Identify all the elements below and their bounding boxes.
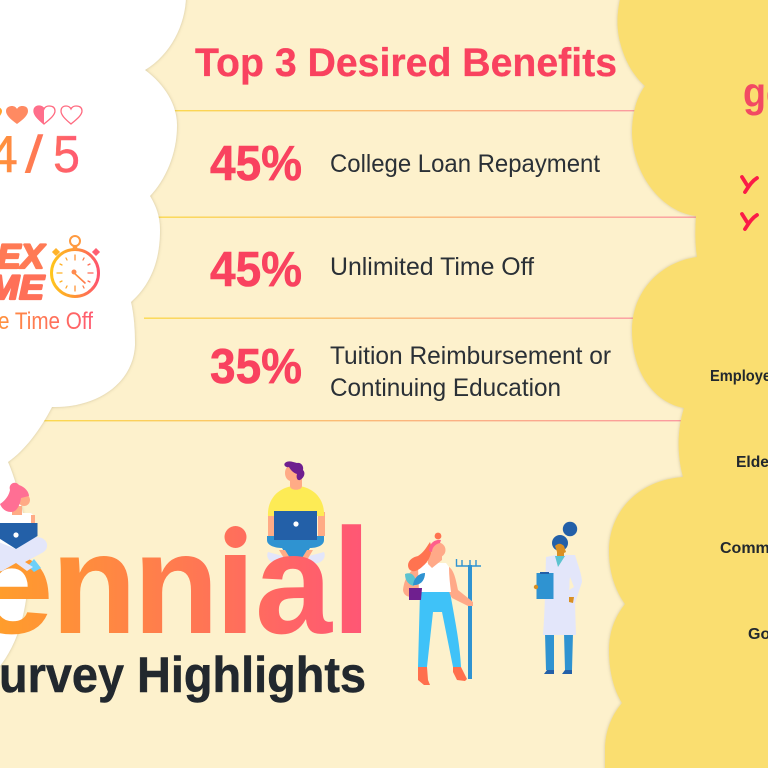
benefit row 3: 35%	[210, 340, 302, 394]
rating score	[0, 126, 80, 184]
title: ennial	[0, 497, 371, 665]
heading: top 3 desired benefits: Top 3 Desired Benefits	[195, 41, 617, 85]
figure: doctor with clipboard	[534, 522, 582, 674]
benefit row 1: 45%	[210, 137, 302, 191]
title: ennial: n	[51, 505, 137, 664]
title: ennial: i	[214, 497, 256, 665]
rating score: 5	[53, 126, 80, 184]
icon: stopwatch	[52, 236, 99, 296]
flex time caption: e Time Off	[0, 308, 93, 335]
divider rows	[40, 110, 696, 421]
panel: white cloud left	[0, 0, 186, 672]
benefit row 1: College Loan Repayment	[330, 150, 600, 178]
figure: woman with laptop	[0, 483, 47, 572]
title: ennial: n	[133, 505, 219, 664]
subtitle: survey highlights: urvey Highlights	[0, 647, 366, 703]
figure: gardener with rake	[403, 533, 481, 685]
benefit row 3: Continuing Education	[330, 374, 561, 402]
benefit row 1	[210, 137, 600, 191]
title: ennial: a	[255, 505, 333, 664]
panel: yellow cloud right	[605, 0, 768, 768]
flex time logo	[0, 238, 46, 307]
figure: man with laptop	[267, 461, 325, 564]
rating score: /	[25, 126, 44, 184]
icon: check marks	[742, 177, 757, 229]
title: ennial: l	[332, 497, 371, 665]
benefit row 3: Tuition Reimbursement or	[330, 342, 611, 370]
benefit row 2: 45%	[210, 243, 302, 297]
benefit row 3	[210, 340, 611, 402]
benefit row 2	[210, 243, 534, 297]
hearts rating	[0, 106, 82, 124]
benefit row 2: Unlimited Time Off	[330, 253, 534, 281]
